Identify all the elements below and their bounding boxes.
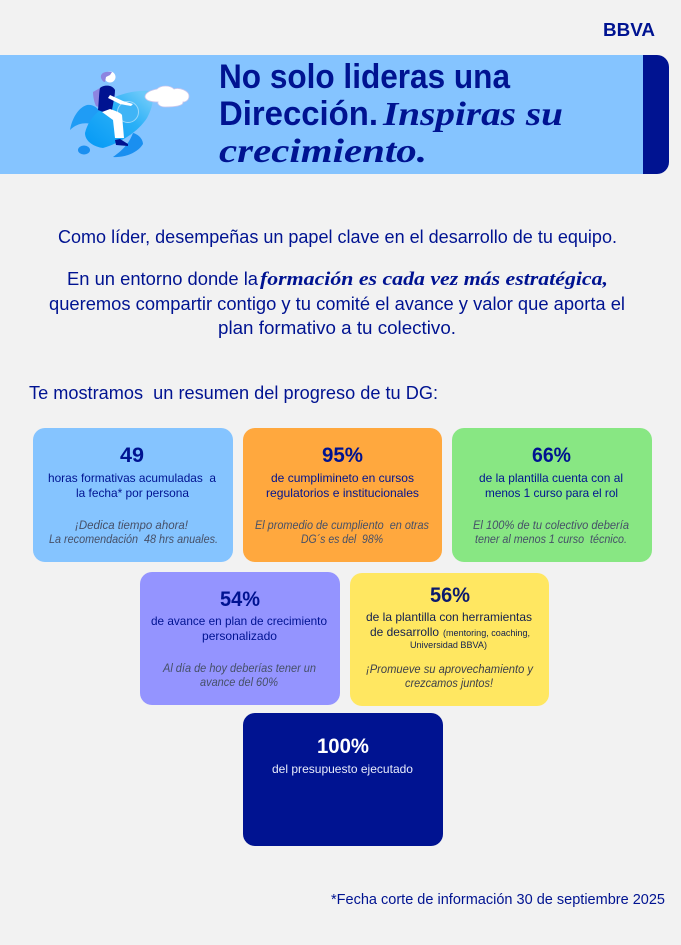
card: 66% bbox=[452, 428, 652, 562]
intro text: plan formativo a tu colectivo. bbox=[218, 318, 456, 338]
section heading: Te mostramos un resumen del progreso de tu DG: bbox=[29, 383, 438, 403]
card: 95%: regulatorios e institucionales bbox=[266, 486, 419, 500]
intro text: formación es cada vez más estratégica, bbox=[260, 269, 608, 290]
card: 56%: crezcamos juntos! bbox=[405, 676, 494, 690]
card: 56%: Universidad BBVA) bbox=[410, 640, 487, 650]
card: 95%: 95% bbox=[322, 444, 363, 467]
card: 49 horas bbox=[33, 428, 233, 562]
card: 66%: 66% bbox=[532, 444, 571, 467]
card: 54% bbox=[140, 572, 340, 705]
card: 54%: de avance en plan de crecimiento bbox=[151, 614, 327, 628]
logo: BBVA: BBVA bbox=[603, 20, 655, 40]
card: 56%: ¡Promueve su aprovechamiento y bbox=[366, 662, 534, 676]
card: 95%: El promedio de cumpliento en otras bbox=[255, 518, 429, 532]
card: 66%: tener al menos 1 curso técnico. bbox=[475, 532, 627, 546]
card: 66%: El 100% de tu colectivo debería bbox=[473, 518, 629, 532]
card: 49 horas: ¡Dedica tiempo ahora! bbox=[75, 518, 189, 532]
card: 54%: 54% bbox=[220, 588, 260, 611]
intro text: Como líder, desempeñas un papel clave en el desarrollo de tu equipo. bbox=[58, 227, 617, 247]
card: 56%: 56% bbox=[430, 584, 470, 607]
card: 54%: avance del 60% bbox=[200, 675, 278, 689]
card: 100% bbox=[243, 713, 443, 846]
card: 49 horas: la fecha* por persona bbox=[76, 486, 189, 500]
card: 95% bbox=[243, 428, 442, 562]
title: No solo lideras una bbox=[219, 58, 511, 96]
card: 100%: del presupuesto ejecutado bbox=[272, 762, 413, 776]
card: 56%: de la plantilla con herramientas bbox=[366, 610, 532, 624]
card: 66%: de la plantilla cuenta con al bbox=[479, 471, 623, 485]
card: 95%: DG´s es del 98% bbox=[301, 532, 383, 546]
card: 66%: menos 1 curso para el rol bbox=[485, 486, 618, 500]
icon: person riding a rocket bbox=[70, 72, 189, 157]
banner bbox=[0, 55, 669, 174]
card: 49 horas: horas formativas acumuladas a bbox=[48, 471, 216, 485]
card: 56%: de desarrollo bbox=[370, 625, 439, 639]
card: 49 horas: La recomendación 48 hrs anuales. bbox=[49, 532, 218, 546]
footnote: *Fecha corte de información 30 de septiembre 2025 bbox=[331, 892, 665, 908]
card: 54%: Al día de hoy deberías tener un bbox=[162, 661, 316, 675]
title: Inspiras su bbox=[382, 96, 563, 133]
card: 56%: (mentoring, coaching, bbox=[443, 628, 530, 638]
card: 56% bbox=[350, 573, 549, 706]
title: Dirección. bbox=[219, 95, 378, 133]
intro text bbox=[49, 227, 625, 338]
title bbox=[219, 58, 563, 170]
card: 54%: personalizado bbox=[202, 629, 277, 643]
card: 49 horas: 49 bbox=[120, 444, 144, 467]
intro text: queremos compartir contigo y tu comité el avance y valor que aporta el bbox=[49, 294, 625, 314]
card: 95%: de cumplimineto en cursos bbox=[271, 471, 414, 485]
card: 100%: 100% bbox=[317, 735, 369, 758]
intro text: En un entorno donde la bbox=[67, 269, 259, 289]
title: crecimiento. bbox=[219, 133, 427, 170]
